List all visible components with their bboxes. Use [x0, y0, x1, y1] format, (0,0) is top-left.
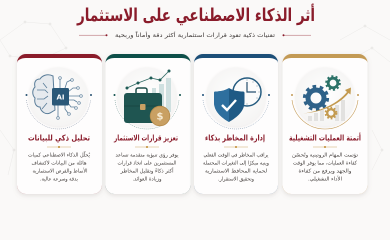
- gear green: [326, 76, 340, 90]
- panel: data analysis: [17, 54, 102, 194]
- panel: process automation: [282, 54, 368, 194]
- text block: تؤتمت المهام الروتينية وتُحسّن: [292, 152, 359, 158]
- gear gold: [326, 108, 336, 118]
- text block: وتحقيق الاستقرار.: [218, 176, 254, 182]
- panel: risk management: [194, 54, 278, 194]
- icon: briefcase and growth chart: $: [157, 112, 164, 122]
- text block: [116, 152, 179, 182]
- text block: كفاءة العمليات، مما يوفر الوقت: [293, 160, 357, 166]
- heading: تحليل ذكي للبيانات: [28, 134, 90, 142]
- text block: [28, 150, 91, 182]
- text block: أكثر ذكاءً وتقليل المخاطر: [120, 166, 174, 174]
- panel: investment decisions: [106, 54, 190, 194]
- text block: يوفر رؤى تنبؤية متقدمة تساعد: [116, 152, 179, 158]
- subtitle: تقنيات ذكية تقود قرارات استثمارية أكثر دقة وأماناً وربحية: [115, 31, 276, 39]
- text block: الأداء التشغيلي.: [308, 176, 342, 182]
- icon: gears and growth arrow: [291, 68, 359, 129]
- text block: يُحلّل الذكاء الاصطناعي كميات: [28, 150, 91, 158]
- heading: تعزيز قرارات الاستثمار: [113, 134, 178, 142]
- text block: وينبه مبكرًا إلى التغيرات المحتملة: [203, 160, 269, 166]
- divider: [224, 146, 248, 148]
- text block: والجهد ويرفع من كفاءة: [298, 168, 352, 174]
- text block: [203, 152, 269, 182]
- heading: إدارة المخاطر بذكاء: [205, 134, 265, 142]
- text block: وزيادة العوائد.: [132, 176, 162, 182]
- text block: لحماية المحافظ الاستثمارية: [205, 168, 267, 174]
- divider: [47, 146, 71, 148]
- divider: [135, 146, 159, 148]
- text block: الأنماط والفرص الاستثمارية: [32, 168, 88, 174]
- text block: [292, 152, 359, 182]
- title: أثر الذكاء الاصطناعي على الاستثمار: [76, 4, 315, 26]
- divider: [313, 146, 337, 148]
- icon: shield and clock: [202, 68, 270, 129]
- text block: هائلة من البيانات لاكتشاف: [32, 160, 87, 166]
- text block: المستثمرين على اتخاذ قرارات: [118, 160, 176, 166]
- text block: بدقة وسرعة عالية.: [40, 176, 78, 182]
- heading: أتمتة العمليات التشغيلية: [289, 132, 361, 142]
- text block: يراقب المخاطر في الوقت الفعلي: [204, 152, 269, 158]
- icon: AI brain chip: AI: [56, 94, 65, 102]
- gear large: [304, 86, 328, 110]
